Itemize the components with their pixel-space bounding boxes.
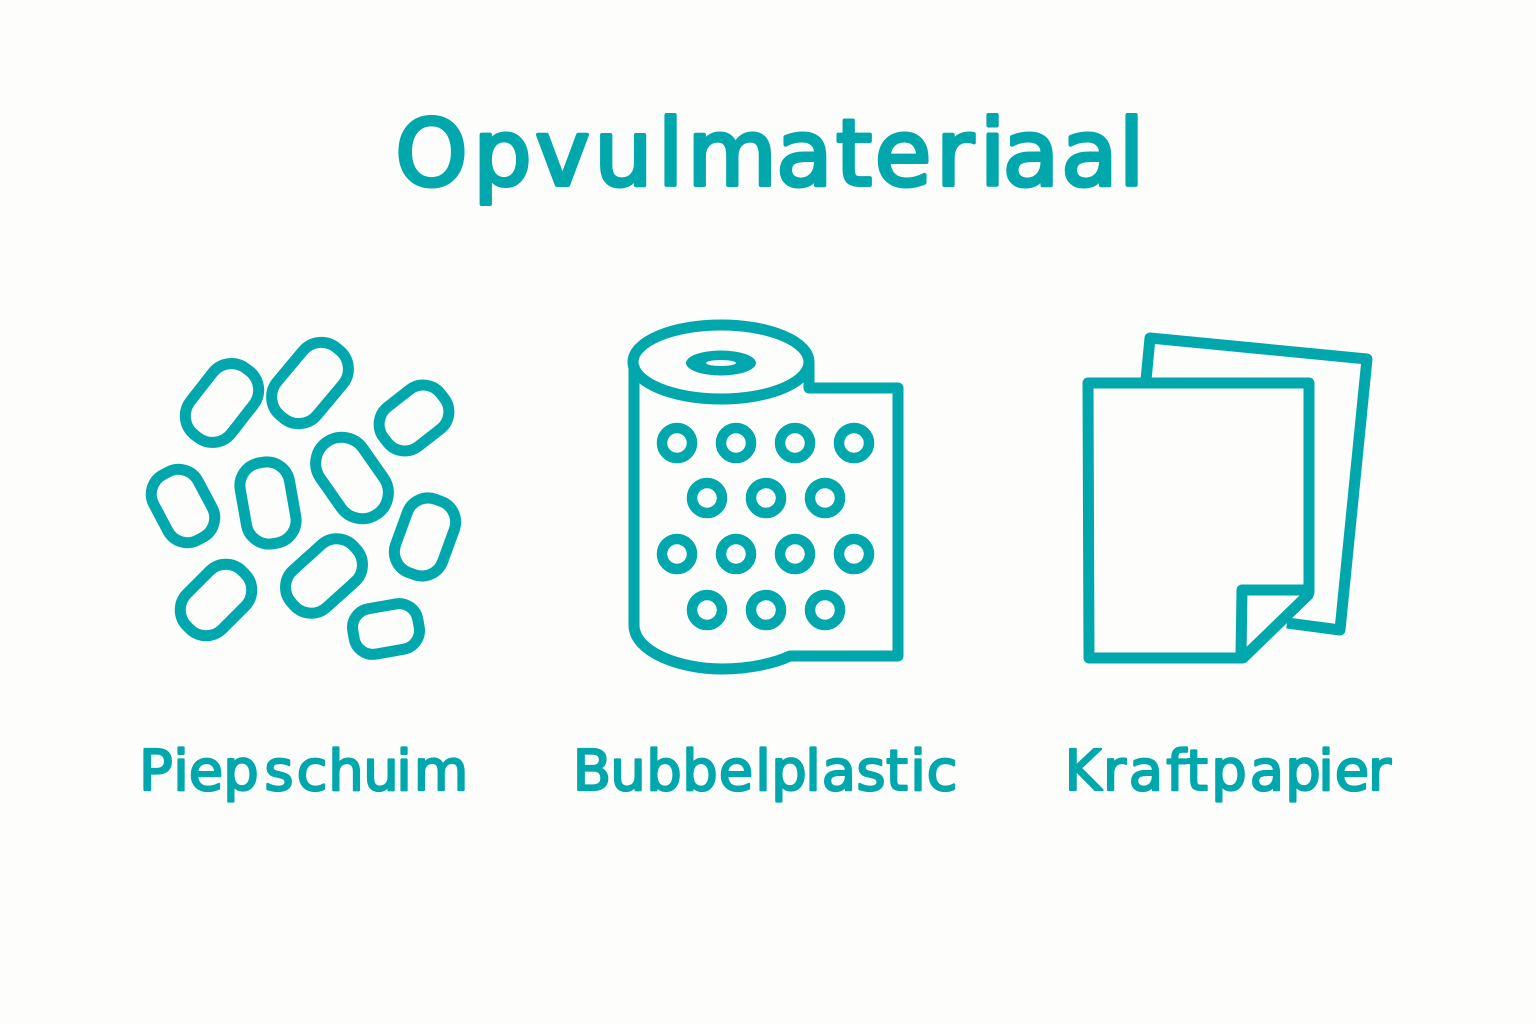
title: Opvulmateriaal — [395, 100, 1144, 207]
icon: kraft paper sheets — [1088, 338, 1367, 658]
peanut 2 — [262, 333, 358, 433]
peanut 1 — [176, 354, 268, 452]
bubbles — [662, 428, 869, 625]
back sheet — [1146, 338, 1367, 630]
roll core — [686, 350, 756, 376]
peanut 3 — [370, 376, 458, 460]
peanut 8 — [276, 529, 372, 623]
peanut 4 — [144, 462, 222, 550]
folded corner — [1241, 590, 1309, 655]
label: Kraftpapier: Kraftpapier — [1065, 739, 1392, 804]
label: Piepschuim: Piepschuim — [139, 739, 468, 804]
peanut 9 — [171, 555, 261, 645]
roll body and sheet — [634, 362, 898, 669]
peanut 10 — [350, 601, 422, 657]
icon: foam packing peanuts — [144, 333, 462, 657]
peanut 7 — [388, 492, 462, 582]
roll top — [633, 325, 809, 399]
peanut 6 — [305, 427, 399, 529]
label: Bubbelplastic: Bubbelplastic — [573, 739, 957, 804]
peanut 5 — [236, 458, 300, 548]
front sheet — [1088, 383, 1309, 658]
icon: bubble wrap roll — [633, 325, 898, 669]
